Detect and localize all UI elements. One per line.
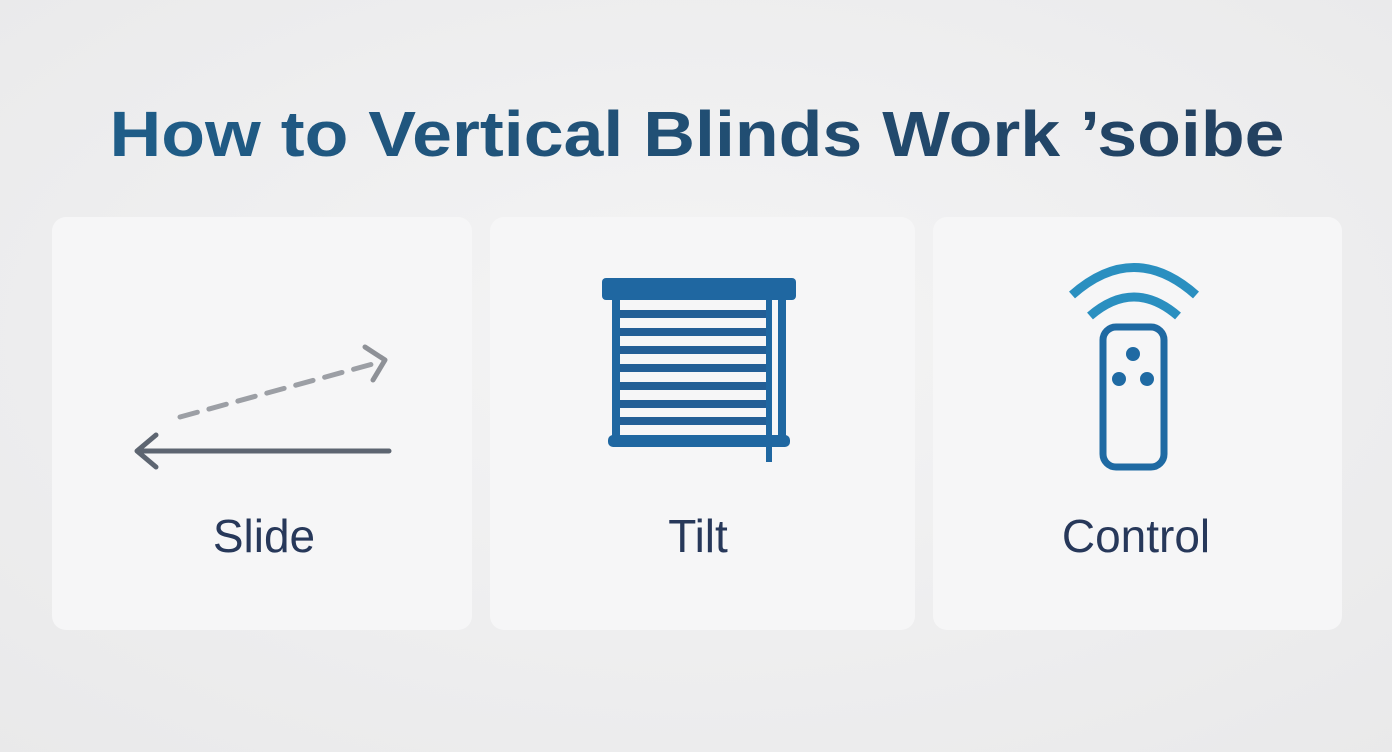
panel: slide: [52, 217, 472, 630]
icon: remote: [1072, 268, 1196, 467]
icon: slide arrows: [137, 347, 389, 467]
label: Tilt: Tilt: [668, 510, 728, 562]
panel: tilt: [490, 217, 915, 630]
label: Slide: Slide: [213, 510, 315, 562]
panel: control: [933, 217, 1342, 630]
label: Control: Control: [1062, 510, 1210, 562]
title: How to Vertical Blinds Work ’soibe: [110, 98, 1284, 170]
icon: blinds: [602, 278, 796, 462]
